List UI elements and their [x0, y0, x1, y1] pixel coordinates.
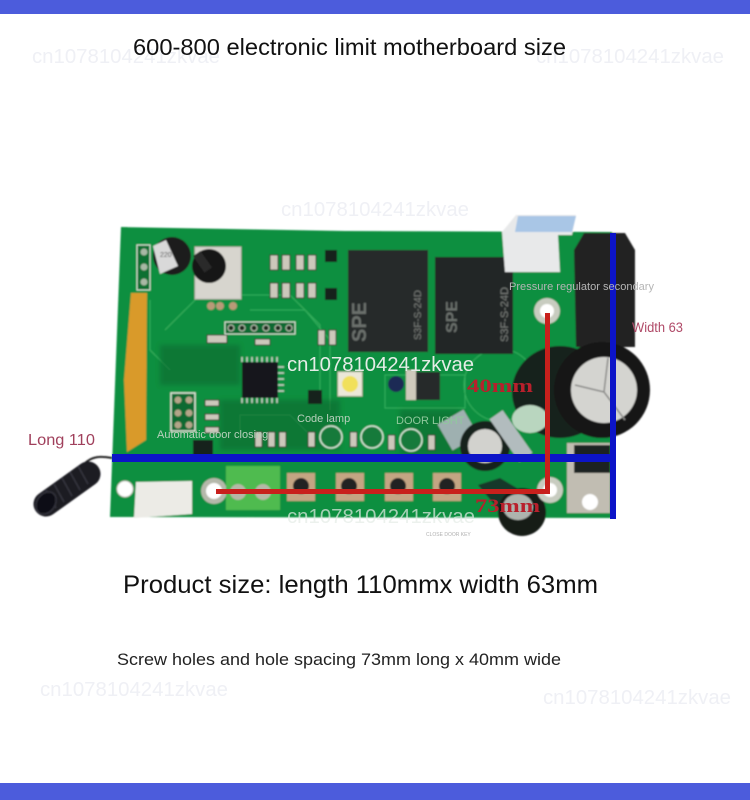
label: code lamp: Code lamp: [297, 413, 350, 425]
dimension line: red length: [216, 489, 550, 494]
mounting hole bottom right: [537, 477, 563, 503]
green terminal: [226, 466, 280, 510]
label: width 63: Width 63: [632, 320, 683, 335]
overlay watermarks: cn1078104241zkvae: [287, 354, 474, 376]
watermarks: [32, 46, 731, 709]
product size heading: Product size: length 110mmx width 63mm: [123, 571, 598, 599]
resistor: [490, 410, 532, 462]
bridge rectifier: [574, 233, 635, 347]
dark PCB patches: [160, 345, 460, 455]
green PCB: [110, 227, 612, 518]
label: door light: DOOR LIGHT: [396, 415, 465, 427]
label: close door key: CLOSE DOOR KEY: [426, 532, 471, 538]
LED rings: [320, 426, 422, 451]
mounting hole bottom left: [201, 478, 227, 504]
large capacitor: [512, 342, 650, 438]
small capacitor: 220: [160, 252, 172, 259]
top banner: [0, 0, 750, 14]
small capacitor: [153, 237, 191, 275]
screw hole spacing text: Screw holes and hole spacing 73mm long x 40mm wide: [117, 650, 561, 669]
transistors: [193, 250, 337, 456]
dimension line: blue length: [112, 454, 612, 462]
top white connector: [502, 215, 576, 272]
bottom white connector: [117, 481, 192, 518]
label: long 110: Long 110: [28, 432, 95, 449]
rotary switch: [192, 247, 241, 310]
relay 1: [348, 250, 428, 352]
relay 1: SPE: [349, 302, 371, 342]
photo: circuit board: [32, 215, 650, 536]
mounting hole top right: [534, 298, 560, 324]
title: 600-800 electronic limit motherboard size: [133, 34, 566, 60]
tactile buttons: [287, 473, 461, 501]
microcontroller chip: [242, 357, 284, 403]
relay 1: S3F-S-24D: [413, 290, 424, 340]
lower capacitor: [478, 478, 546, 536]
relay 2: S3F-S-24D: [499, 287, 511, 342]
bottom banner: [0, 783, 750, 800]
white hatched area: [512, 405, 548, 433]
LED code lamp: [338, 372, 362, 396]
MOSFET heat tab: [567, 443, 610, 513]
antenna coil: [32, 457, 112, 518]
door transistor: [388, 370, 440, 400]
jumper block: [171, 393, 195, 431]
label: 73mm: 73mm: [475, 496, 540, 517]
label: pressure regulator secondary: Pressure regulator secondary: [509, 281, 654, 293]
overlay watermarks: cn1078104241zkvae: [287, 506, 475, 528]
label: automatic door closing: Automatic door closing: [157, 429, 268, 441]
SMD resistors: [205, 255, 435, 450]
orange antenna strip: [124, 293, 147, 452]
overlay watermarks: [287, 354, 475, 528]
watermarks: cn1078104241zkvae: [32, 46, 220, 68]
dimension line: blue width: [610, 233, 616, 519]
watermarks: cn1078104241zkvae: [281, 199, 469, 221]
pin header row: [225, 322, 295, 334]
watermarks: cn1078104241zkvae: [543, 687, 731, 709]
watermarks: cn1078104241zkvae: [40, 679, 228, 701]
relay 2: [435, 257, 513, 354]
medium capacitor: [438, 410, 510, 471]
dimension line: red width: [545, 313, 550, 491]
label: 40mm: 40mm: [467, 376, 533, 397]
relay 2: SPE: [444, 301, 461, 333]
header pins: [137, 245, 150, 290]
watermarks: cn1078104241zkvae: [536, 46, 724, 68]
